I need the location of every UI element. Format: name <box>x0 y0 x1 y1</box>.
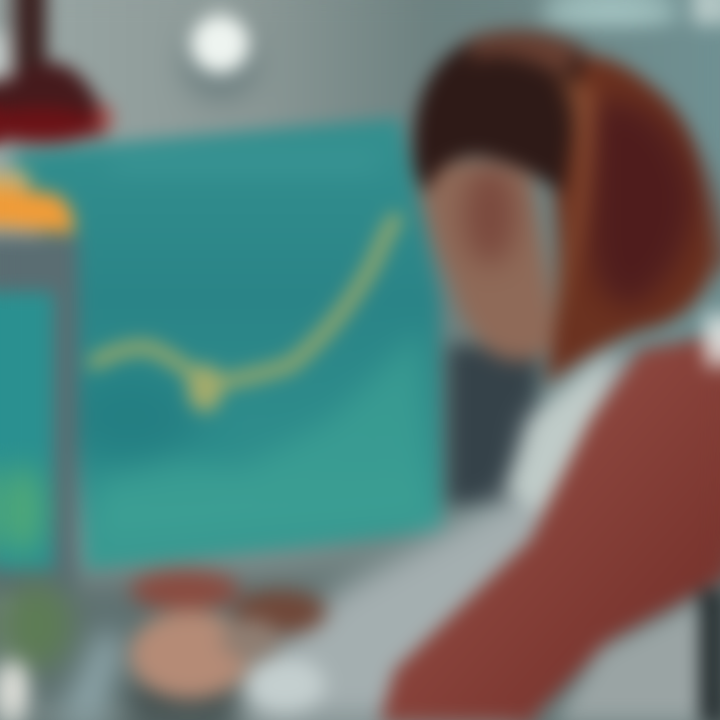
hands <box>130 570 326 699</box>
bar area of chart <box>95 330 432 540</box>
dark gap behind person <box>448 345 538 505</box>
person <box>130 32 720 720</box>
face <box>420 160 560 361</box>
left monitor <box>0 236 78 596</box>
line chart <box>95 220 395 412</box>
ceiling light: white <box>182 15 258 101</box>
desk items bottom-left <box>0 581 240 720</box>
hair <box>414 32 716 385</box>
orange highlight <box>0 172 74 234</box>
shirt sleeve: white <box>240 350 660 720</box>
pendant lamp: dark red <box>0 0 112 143</box>
red jacket <box>380 335 720 720</box>
main monitor screen <box>10 118 442 570</box>
